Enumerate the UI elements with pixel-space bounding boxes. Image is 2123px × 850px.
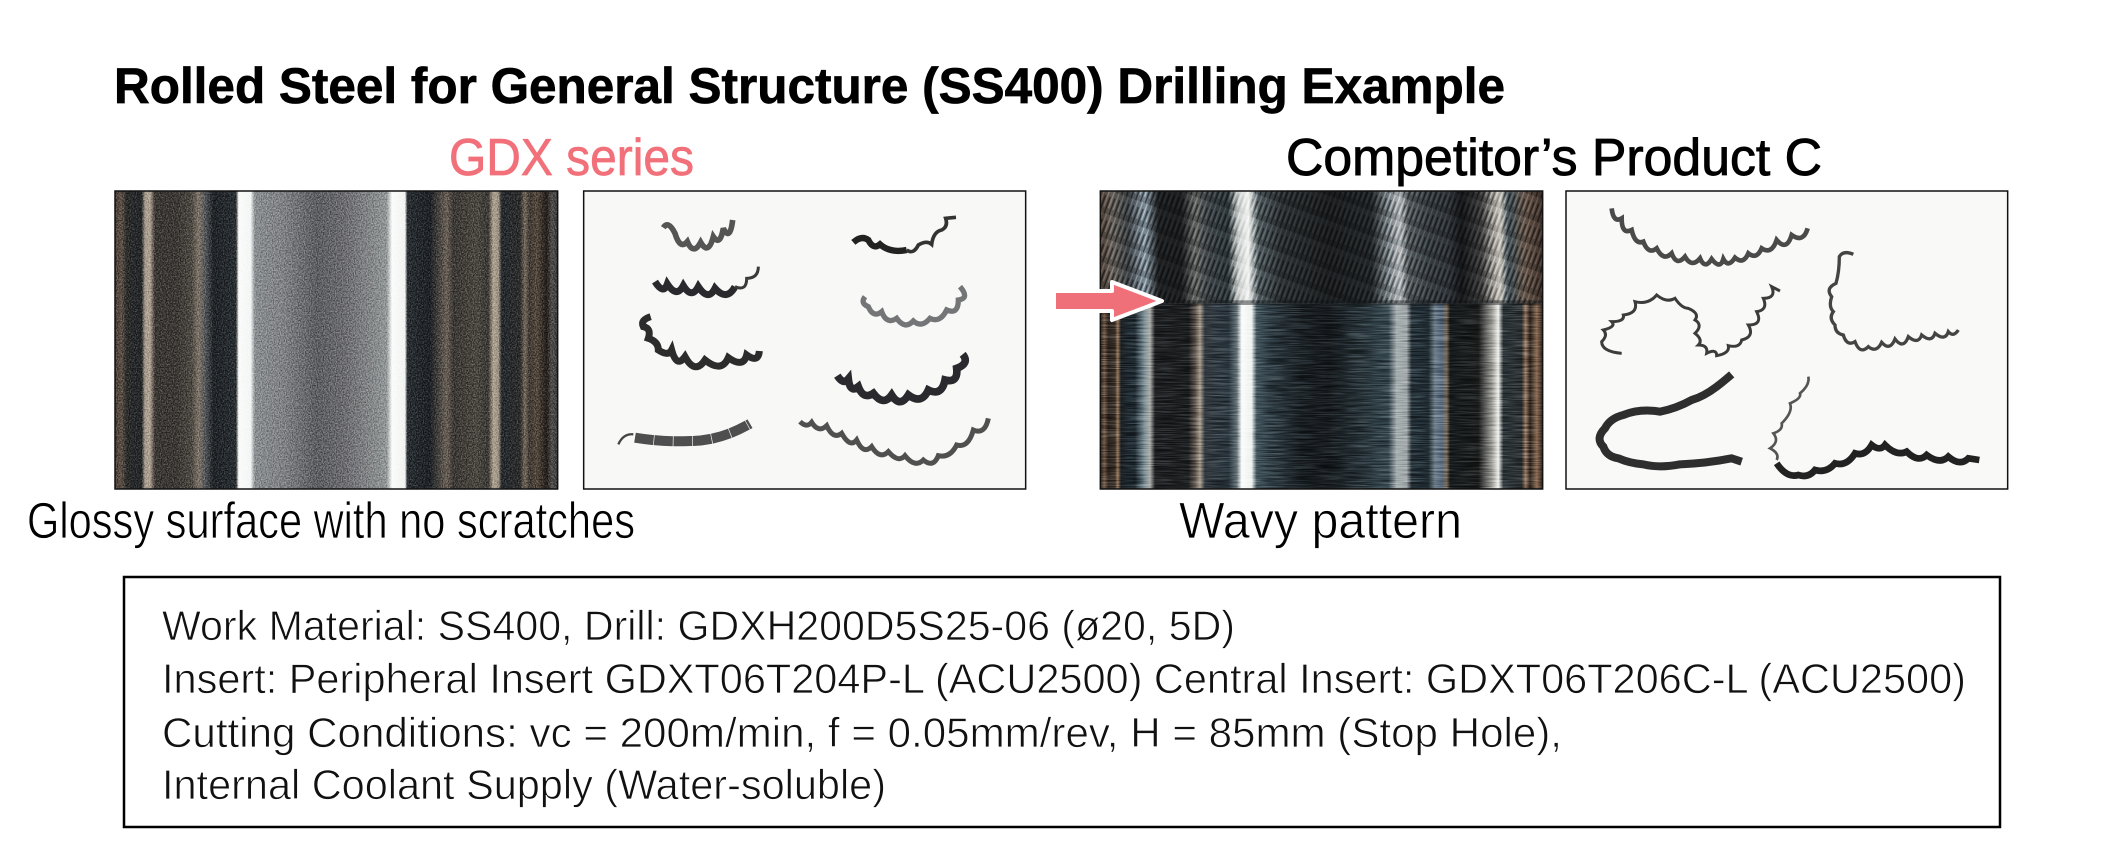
panel: test conditions	[124, 577, 2000, 827]
chip C	[1829, 253, 1958, 350]
chip E	[1770, 377, 1979, 476]
panel: GDX chips photo	[584, 191, 1026, 489]
chip 5	[853, 217, 956, 252]
chip 2	[655, 267, 758, 295]
caption: glossy surface: Glossy surface with no scratches	[27, 492, 635, 549]
heading: Competitor's Product C: Competitor’s Product C	[1286, 129, 1822, 187]
panel: GDX machined surface photo	[115, 191, 558, 489]
arrow	[1054, 282, 1162, 320]
chip 6	[863, 287, 965, 325]
panel: competitor machined surface photo	[1100, 191, 1543, 489]
title: Rolled Steel for General Structure (SS400) Drilling Example	[114, 58, 1505, 114]
conditions line 4: Internal Coolant Supply (Water-soluble)	[162, 761, 886, 808]
chip 8	[800, 418, 988, 463]
chip 4	[618, 424, 750, 444]
chip D	[1600, 374, 1742, 466]
conditions line 3: Cutting Conditions: vc = 200m/min, f = 0.05mm/rev, H = 85mm (Stop Hole),	[162, 709, 1562, 756]
chip B	[1602, 287, 1780, 356]
heading: GDX series: GDX series	[449, 129, 694, 187]
conditions line 2: Insert: Peripheral Insert GDXT06T204P-L (ACU2500) Central Insert: GDXT06T206C-L (ACU2500)	[162, 655, 1966, 702]
chip 1	[663, 220, 733, 249]
caption: wavy pattern: Wavy pattern	[1179, 492, 1462, 549]
chip 7	[837, 354, 965, 402]
conditions line 1: Work Material: SS400, Drill: GDXH200D5S25-06 (ø20, 5D)	[162, 602, 1235, 649]
panel: competitor chips photo	[1566, 191, 2008, 489]
chip 3	[643, 317, 759, 367]
chip A	[1612, 208, 1808, 264]
